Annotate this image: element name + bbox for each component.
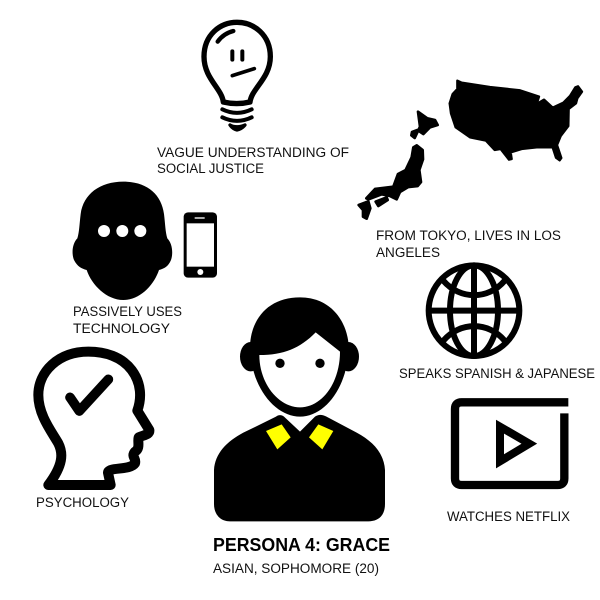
- text: hometown: [376, 228, 561, 260]
- subtitle: demographics: ASIAN, SOPHOMORE (20): [213, 561, 379, 576]
- text: technology: [73, 304, 182, 336]
- body: [214, 415, 385, 521]
- text: languages: SPEAKS SPANISH & JAPANESE: [399, 366, 595, 381]
- face: [259, 332, 340, 407]
- collar left: [266, 424, 291, 449]
- eyes: [275, 359, 325, 368]
- text: hometown: ANGELES: [376, 245, 440, 260]
- head and hair: [250, 297, 349, 417]
- text: social justice: [157, 145, 349, 176]
- icon: head with check mark: [38, 352, 149, 485]
- icon: map of Japan: [359, 112, 438, 219]
- text: netflix: WATCHES NETFLIX: [447, 509, 570, 524]
- text: social justice: SOCIAL JUSTICE: [157, 161, 264, 176]
- title: persona name: PERSONA 4: GRACE: [213, 535, 390, 555]
- text: psychology: PSYCHOLOGY: [36, 495, 129, 510]
- ears: [240, 342, 359, 371]
- text: social justice: VAGUE UNDERSTANDING OF: [157, 145, 349, 160]
- icon: video player: [455, 402, 568, 485]
- collar right: [309, 424, 333, 449]
- icon: light bulb: [204, 22, 270, 130]
- icon: smartphone: [184, 212, 217, 278]
- text: technology: PASSIVELY USES: [73, 304, 182, 319]
- text: hometown: FROM TOKYO, LIVES IN LOS: [376, 228, 561, 243]
- icon: map of USA: [450, 81, 582, 160]
- icon: globe: [429, 265, 519, 356]
- text: technology: TECHNOLOGY: [73, 321, 170, 336]
- persona figure: [214, 297, 385, 521]
- icon: head with dots: [73, 182, 172, 300]
